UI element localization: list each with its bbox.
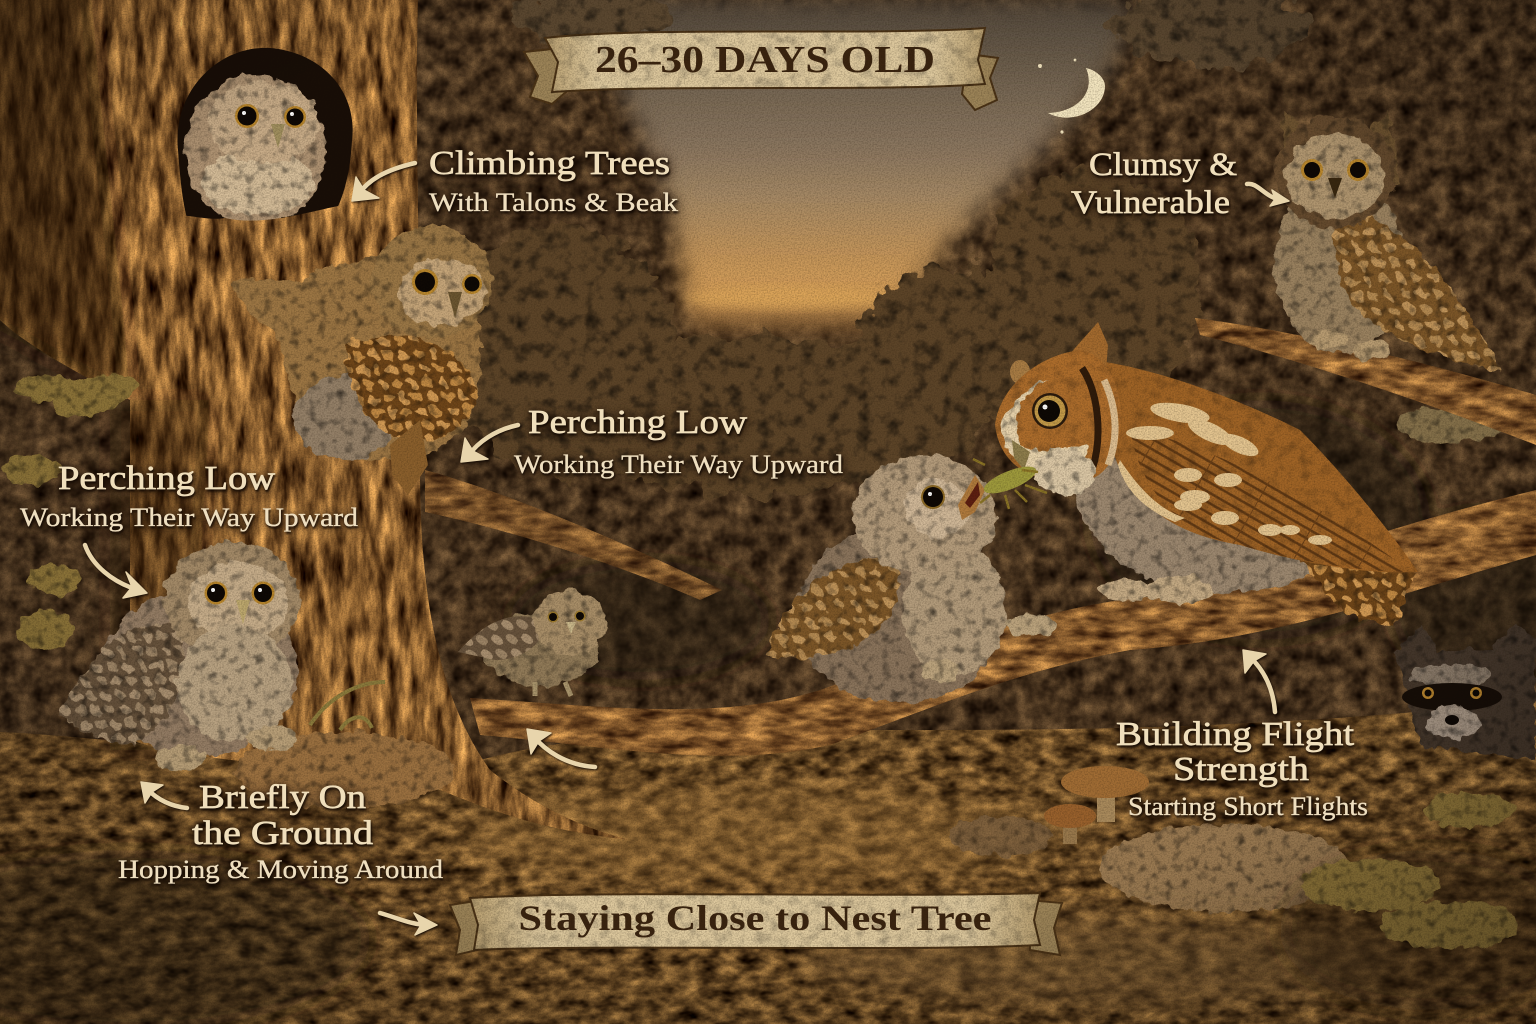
label: clumsy and vulnerable: Clumsy & [1089,147,1237,183]
arrow: to upper right owl [1247,184,1289,206]
label: perching low, centre: Working Their Way Upward [514,450,843,479]
mid-distance tree canopy silhouettes [445,170,1200,495]
label: climbing trees [429,145,678,217]
label: perching low, centre [514,404,843,479]
arrow: to ground [141,782,187,808]
crescent moon and stars [1038,59,1105,134]
arrow: to small owlet [527,729,595,767]
small grass tuft [310,682,385,730]
evening sky [611,0,1130,330]
label: climbing trees: With Talons & Beak [429,188,678,217]
bottom banner [450,893,1062,955]
top branches over the sky [510,0,1310,65]
label: briefly on the ground: the Ground [192,815,373,852]
label: clumsy and vulnerable [1071,147,1237,221]
watching adult owl, upper right [1274,110,1502,372]
label: perching low, left: Working Their Way Upward [20,503,358,532]
label: briefly on the ground: Hopping & Moving Around [118,855,443,884]
forest floor [0,700,1536,1024]
small owlet walking [458,589,606,696]
insect in beak [973,459,1047,509]
owlet on the ground, left [60,542,300,771]
nest tree trunk [0,0,630,840]
dark shaded forest areas [510,400,1536,690]
arrow: to branch [1243,650,1275,712]
main branch [470,490,1536,756]
bottom banner: Staying Close to Nest Tree [518,898,992,938]
raccoon [1395,622,1536,760]
owlet in tree hollow [162,48,353,300]
label: perching low, left: Perching Low [58,460,275,497]
upper right branch [1195,318,1536,445]
fledgling being fed [765,455,1056,703]
label: clumsy and vulnerable: Vulnerable [1071,185,1230,221]
label: building flight strength: Strength [1173,751,1309,788]
label: perching low, centre: Perching Low [528,404,748,441]
tree root mound [235,732,455,808]
label: building flight strength [1116,716,1368,821]
climbing owlet [232,226,492,495]
title banner: 26–30 DAYS OLD [595,39,935,81]
label: perching low, left [20,460,358,532]
background side branch [425,470,722,600]
label: building flight strength: Building Flight [1116,716,1355,753]
arrow: to hollow owlet [352,163,415,201]
label: briefly on the ground: Briefly On [199,779,366,816]
leaves at left and right [0,366,1520,949]
arrow: to climbing owlet [461,425,518,462]
label: briefly on the ground [118,779,443,884]
mushrooms [1044,766,1149,844]
arrow: to bottom banner [380,913,437,935]
label: climbing trees: Climbing Trees [429,145,670,182]
label: building flight strength: Starting Short Flights [1128,792,1368,821]
arrow: to left owlet [85,545,147,598]
adult owl feeding [995,322,1418,628]
title banner [524,28,998,110]
